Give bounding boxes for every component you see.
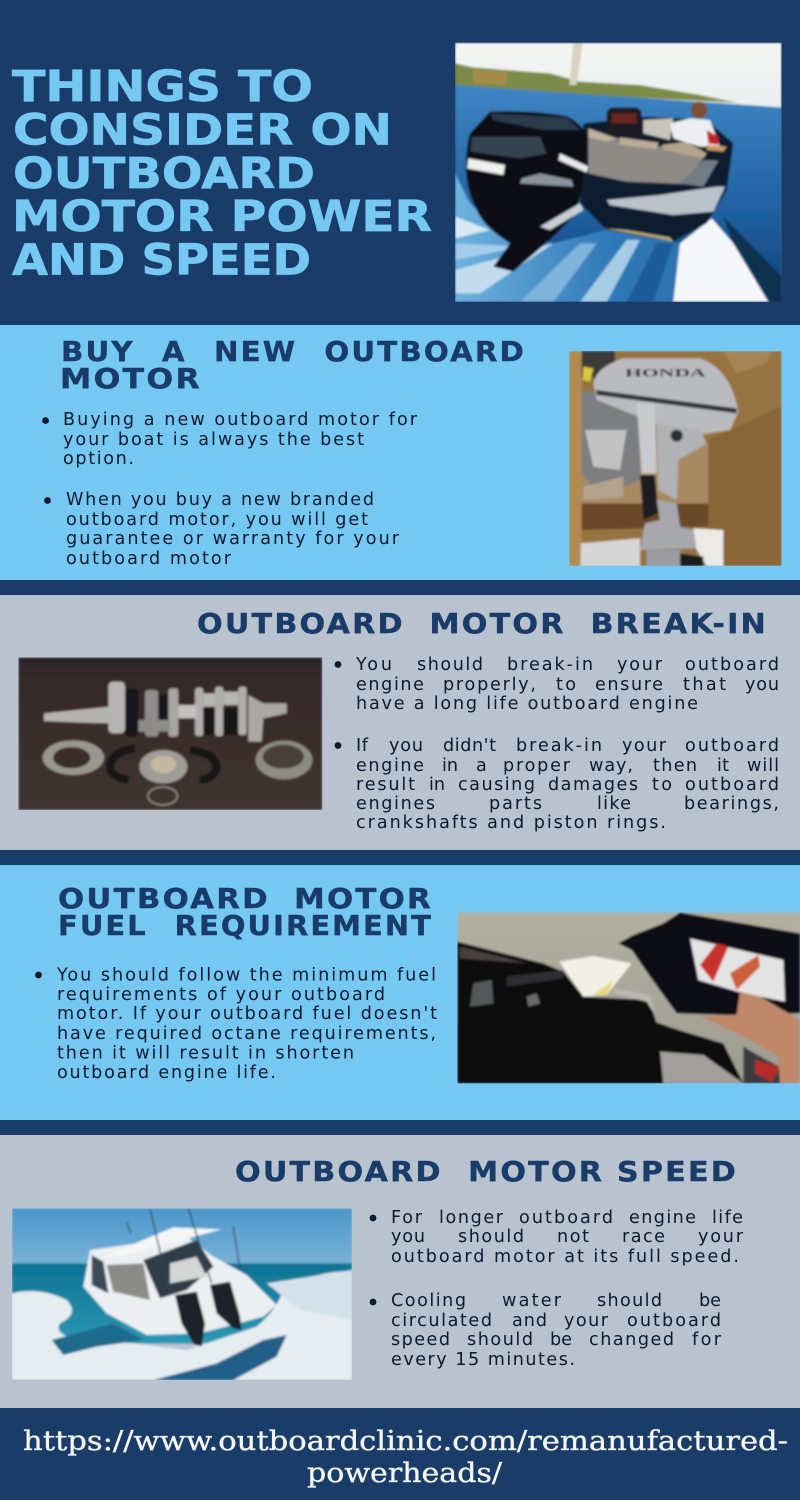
photo: crankshaft and bearings — [18, 657, 322, 810]
divider band — [0, 580, 800, 595]
heading: buy a new outboard motor: BUY A NEW OUTBOARD — [61, 336, 526, 368]
bullet list: break-in: it — [717, 756, 730, 776]
bullet list: fuel: requirements of your outboard — [57, 985, 386, 1005]
bullet list: speed: should — [597, 1291, 663, 1311]
bullet list: speed: For — [391, 1208, 423, 1228]
boat hull and deck — [580, 117, 733, 242]
photo: speeding boat with 250 outboard motor — [455, 43, 782, 302]
bullet list: speed: longer — [439, 1208, 504, 1228]
bullet list: speed: outboard — [519, 1208, 614, 1228]
divider band — [0, 1120, 800, 1135]
bullet list: break-in: outboard — [685, 736, 780, 756]
bullet list: speed: every 15 minutes. — [391, 1350, 576, 1370]
bullet list: break-in: you — [389, 736, 424, 756]
photo: boxed Honda outboard motor: HONDA — [625, 368, 707, 380]
heading: fuel requirement: FUEL REQUIREMENT — [58, 910, 433, 942]
bullet list: break-in: in — [442, 756, 459, 776]
bullet list: break-in: break-in — [516, 736, 603, 756]
bullet list: speed: should — [458, 1227, 525, 1247]
bullet list: fuel: outboard engine life. — [57, 1063, 277, 1083]
heading: fuel requirement: OUTBOARD MOTOR — [58, 883, 433, 915]
footer url: https://www.outboardclinic.com/remanufactured- — [23, 1426, 788, 1457]
bullet list: break-in: properly, — [443, 675, 537, 695]
heading: buy a new outboard motor — [60, 336, 526, 395]
heading: buy a new outboard motor: MOTOR — [60, 363, 202, 395]
bullet list: speed: circulated — [391, 1311, 493, 1331]
bullet list: break-in: bearings, — [684, 794, 780, 814]
bullet list: break-in: You — [355, 655, 393, 675]
photo: boat with twin outboards — [12, 1208, 352, 1380]
footer url: powerheads/ — [307, 1458, 503, 1489]
bullet list: break-in: parts — [489, 794, 543, 814]
bullet list: break-in: to — [556, 675, 577, 695]
bullet list: speed: changed — [589, 1330, 675, 1350]
bullet list: buying new: your boat is always the best — [63, 430, 365, 450]
bullet list: break-in: you — [745, 675, 780, 695]
title: THINGS TO — [12, 63, 313, 112]
bullet list: break-in: will — [747, 756, 780, 776]
bullet list: buying new: When you buy a new branded — [66, 490, 375, 510]
heading: fuel requirement — [58, 883, 433, 942]
bullet list: speed: and — [512, 1311, 548, 1331]
bullet list: break-in: way, — [589, 756, 634, 776]
panel: buy a new outboard motor — [0, 325, 800, 580]
bullet list: break-in: engine — [356, 675, 425, 695]
bullet list: break-in: your — [622, 736, 667, 756]
bullet list: break-in: should — [417, 655, 484, 675]
bullet list: speed: Cooling — [391, 1291, 467, 1311]
bullet list: break-in: outboard — [685, 655, 780, 675]
bullet list: break-in: to — [652, 775, 673, 795]
bullet list: break-in: causing — [458, 775, 536, 795]
bullet list: speed: outboard — [627, 1311, 722, 1331]
bullet list: buying new — [42, 410, 418, 569]
panel: outboard motor fuel requirement — [0, 865, 800, 1120]
divider band — [0, 850, 800, 865]
photo: pouring oil through funnel — [457, 912, 800, 1083]
bullet list: speed: your — [698, 1227, 744, 1247]
driver — [670, 118, 720, 147]
bullet list: break-in: didn't — [443, 736, 497, 756]
bullet list: buying new: Buying a new outboard motor for — [63, 410, 418, 430]
title: OUTBOARD — [13, 150, 315, 199]
bullet list: fuel: You should follow the minimum fuel — [56, 966, 437, 986]
bullet list: fuel — [35, 966, 438, 1083]
bullet list: break-in: damages — [548, 775, 639, 795]
bullet list: break-in: crankshafts and piston rings. — [356, 813, 667, 833]
bullet list: buying new: outboard motor — [66, 549, 232, 569]
bullet list: speed: life — [712, 1208, 744, 1228]
title: CONSIDER ON — [13, 106, 392, 156]
bullet list: fuel: motor. If your outboard fuel doesn't — [57, 1004, 438, 1024]
bullet list: buying new: outboard motor, you will get — [66, 510, 369, 530]
panel: outboard motor break-in — [0, 595, 800, 850]
bullet list: speed: speed — [391, 1330, 451, 1350]
bullet list: speed: should — [467, 1330, 534, 1350]
outboard motor — [466, 111, 587, 272]
title — [12, 63, 432, 286]
heading: outboard motor speed: OUTBOARD MOTOR SPEED — [235, 1156, 738, 1188]
title: AND SPEED — [12, 236, 311, 286]
bullet list: break-in: engines — [356, 794, 436, 814]
bullet list: break-in: engine — [356, 756, 425, 776]
bullet list: speed: outboard motor at its full speed. — [391, 1247, 740, 1267]
header panel — [12, 42, 782, 302]
bullet list: break-in: proper — [503, 756, 571, 776]
bullet list: break-in: have a long life outboard engine — [356, 694, 699, 714]
bullet list: speed: your — [564, 1311, 609, 1331]
bullet list: fuel: have required octane requirements, — [57, 1024, 437, 1044]
bullet list: break-in: like — [597, 794, 632, 814]
bullet list: speed: race — [622, 1227, 666, 1247]
bullet list: break-in: If — [356, 736, 369, 756]
bullet list: break-in: result — [356, 775, 416, 795]
bullet list: speed: be — [550, 1330, 573, 1350]
bullet list: break-in: in — [429, 775, 446, 795]
bullet list: buying new: guarantee or warranty for your — [66, 529, 400, 549]
panel: outboard motor speed — [0, 1135, 800, 1408]
bullet list: speed: water — [502, 1291, 562, 1311]
bullet list: speed: you — [391, 1227, 426, 1247]
bullet list: speed: engine — [629, 1208, 697, 1228]
bullet list: break-in: then — [653, 756, 698, 776]
bullet list: break-in: that — [683, 675, 727, 695]
bullet list: buying new: option. — [63, 449, 135, 469]
bullet list: speed: be — [699, 1291, 722, 1311]
heading: outboard motor break-in: OUTBOARD MOTOR BREAK-IN — [197, 608, 768, 640]
footer url — [23, 1426, 788, 1489]
bullet list: speed: for — [692, 1330, 722, 1350]
footer — [0, 1408, 800, 1500]
bullet list: break-in: outboard — [685, 775, 780, 795]
bullet list: speed: not — [557, 1227, 590, 1247]
bullet list: break-in: your — [617, 655, 663, 675]
bullet list: break-in — [335, 655, 780, 833]
bullet list: break-in: ensure — [595, 675, 664, 695]
bullet list: fuel: then it will result in shorten — [57, 1044, 355, 1064]
bullet list: speed — [370, 1208, 744, 1370]
bullet list: break-in: a — [476, 756, 488, 776]
bullet list: break-in: break-in — [507, 655, 594, 675]
photo: boxed Honda outboard motor — [569, 351, 782, 566]
title: MOTOR POWER — [12, 193, 432, 242]
